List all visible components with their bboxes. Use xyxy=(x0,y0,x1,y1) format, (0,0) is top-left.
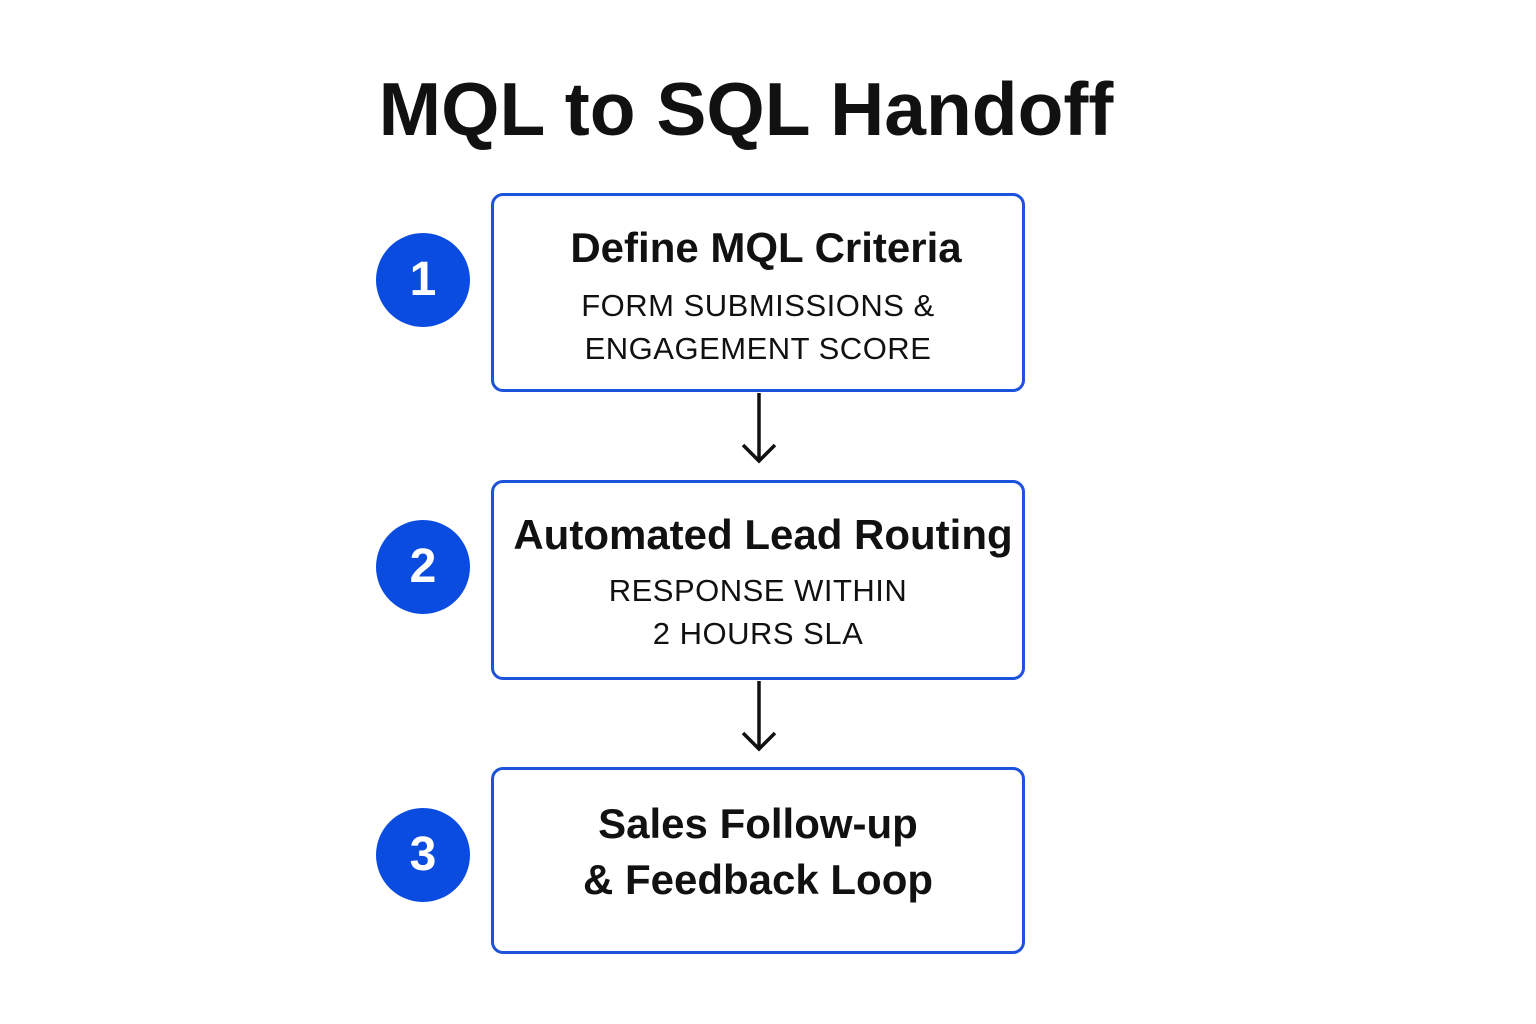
step 1 heading: Define MQL Criteria xyxy=(570,224,962,271)
step 2 detail: 2 HOURS SLA xyxy=(653,616,863,651)
arrow 1 to 2 xyxy=(742,393,776,464)
step 1 detail: ENGAGEMENT SCORE xyxy=(585,331,931,366)
step 1 detail: FORM SUBMISSIONS & xyxy=(581,288,935,323)
step 3 badge xyxy=(376,808,470,902)
step 1 badge xyxy=(376,233,470,327)
arrow 2 to 3 xyxy=(742,681,776,752)
step 2 detail xyxy=(609,573,907,651)
step 2 badge: 2 xyxy=(410,540,436,593)
step 1 box xyxy=(491,193,1025,392)
step 1 detail xyxy=(581,288,935,366)
step 1 badge: 1 xyxy=(410,253,436,306)
title: MQL to SQL Handoff xyxy=(379,67,1113,151)
step 2 box xyxy=(491,480,1025,680)
step 3 heading: & Feedback Loop xyxy=(583,856,933,903)
step 3 heading: Sales Follow-up xyxy=(598,800,918,847)
step 2 heading: Automated Lead Routing xyxy=(513,511,1013,558)
step 2 detail: RESPONSE WITHIN xyxy=(609,573,907,608)
step 2 badge xyxy=(376,520,470,614)
step 3 box xyxy=(491,767,1025,954)
step 3 heading xyxy=(583,800,933,903)
step 3 badge: 3 xyxy=(410,828,436,881)
